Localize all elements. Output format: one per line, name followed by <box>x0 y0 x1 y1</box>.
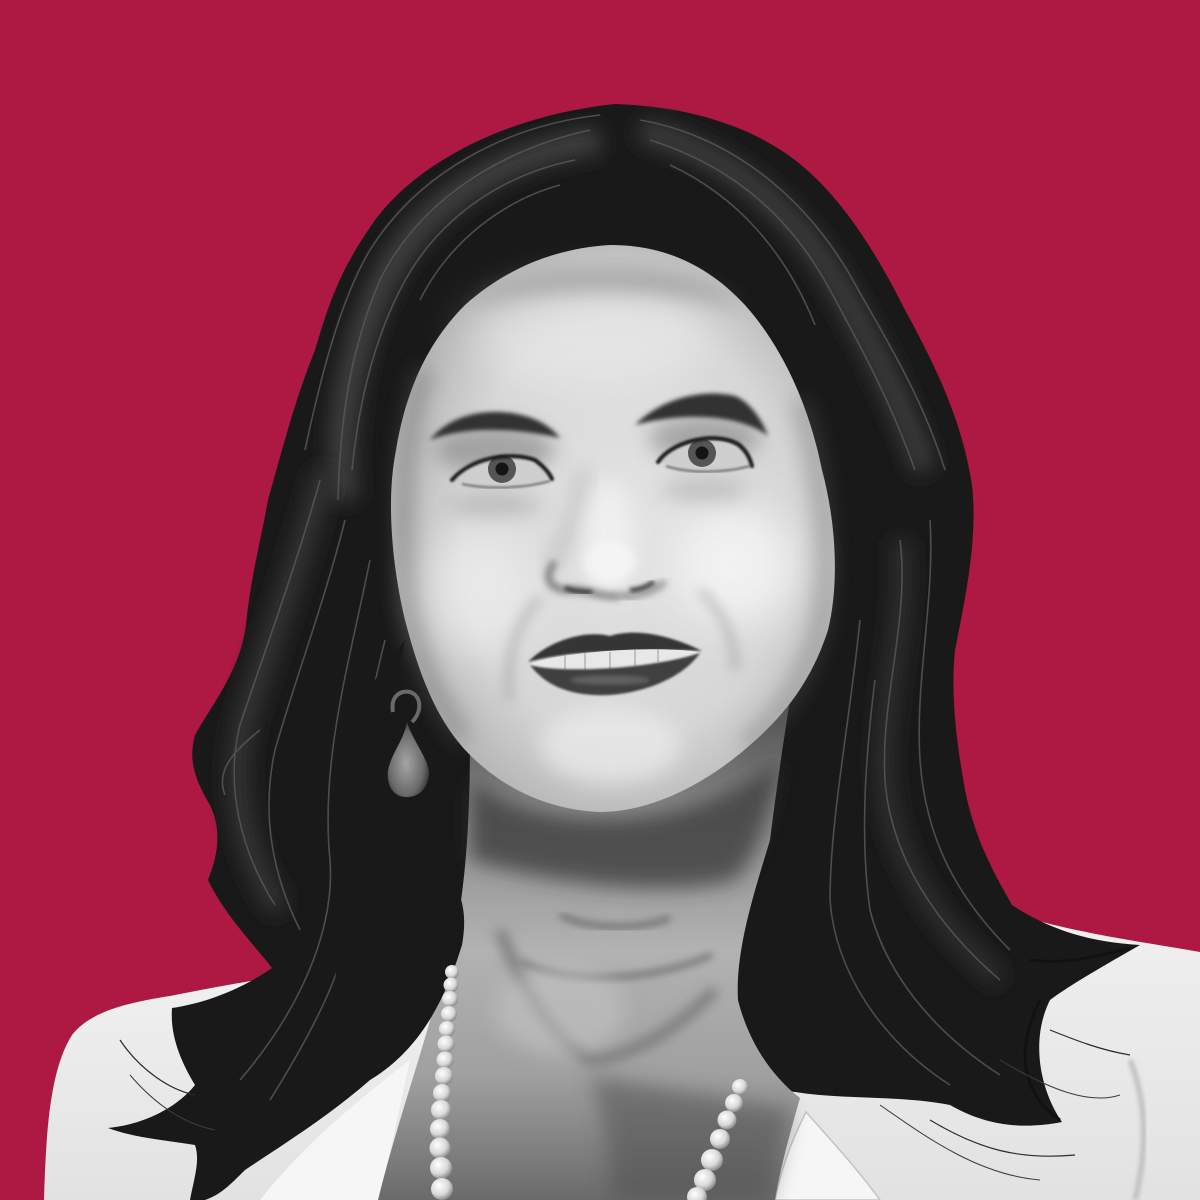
hair strands over jacket <box>130 1060 1120 1180</box>
smile folds <box>509 590 735 700</box>
jacket <box>44 866 1200 1200</box>
eye right <box>658 438 752 472</box>
eye left <box>452 455 552 488</box>
face <box>391 245 835 812</box>
front hair lock over left neck <box>330 640 464 1080</box>
eyebrow right <box>635 394 768 436</box>
pearl necklace <box>430 965 748 1200</box>
hair <box>108 104 1140 1200</box>
neck and chest <box>378 700 800 1200</box>
eyebrow left <box>430 412 560 440</box>
nose <box>549 470 665 600</box>
cheek highlight left <box>425 525 535 655</box>
lips <box>528 633 702 695</box>
chin highlight <box>540 707 680 783</box>
forehead highlight <box>470 290 710 390</box>
cheek highlight right <box>673 505 797 625</box>
eye sockets <box>435 416 761 514</box>
earring <box>388 692 429 797</box>
